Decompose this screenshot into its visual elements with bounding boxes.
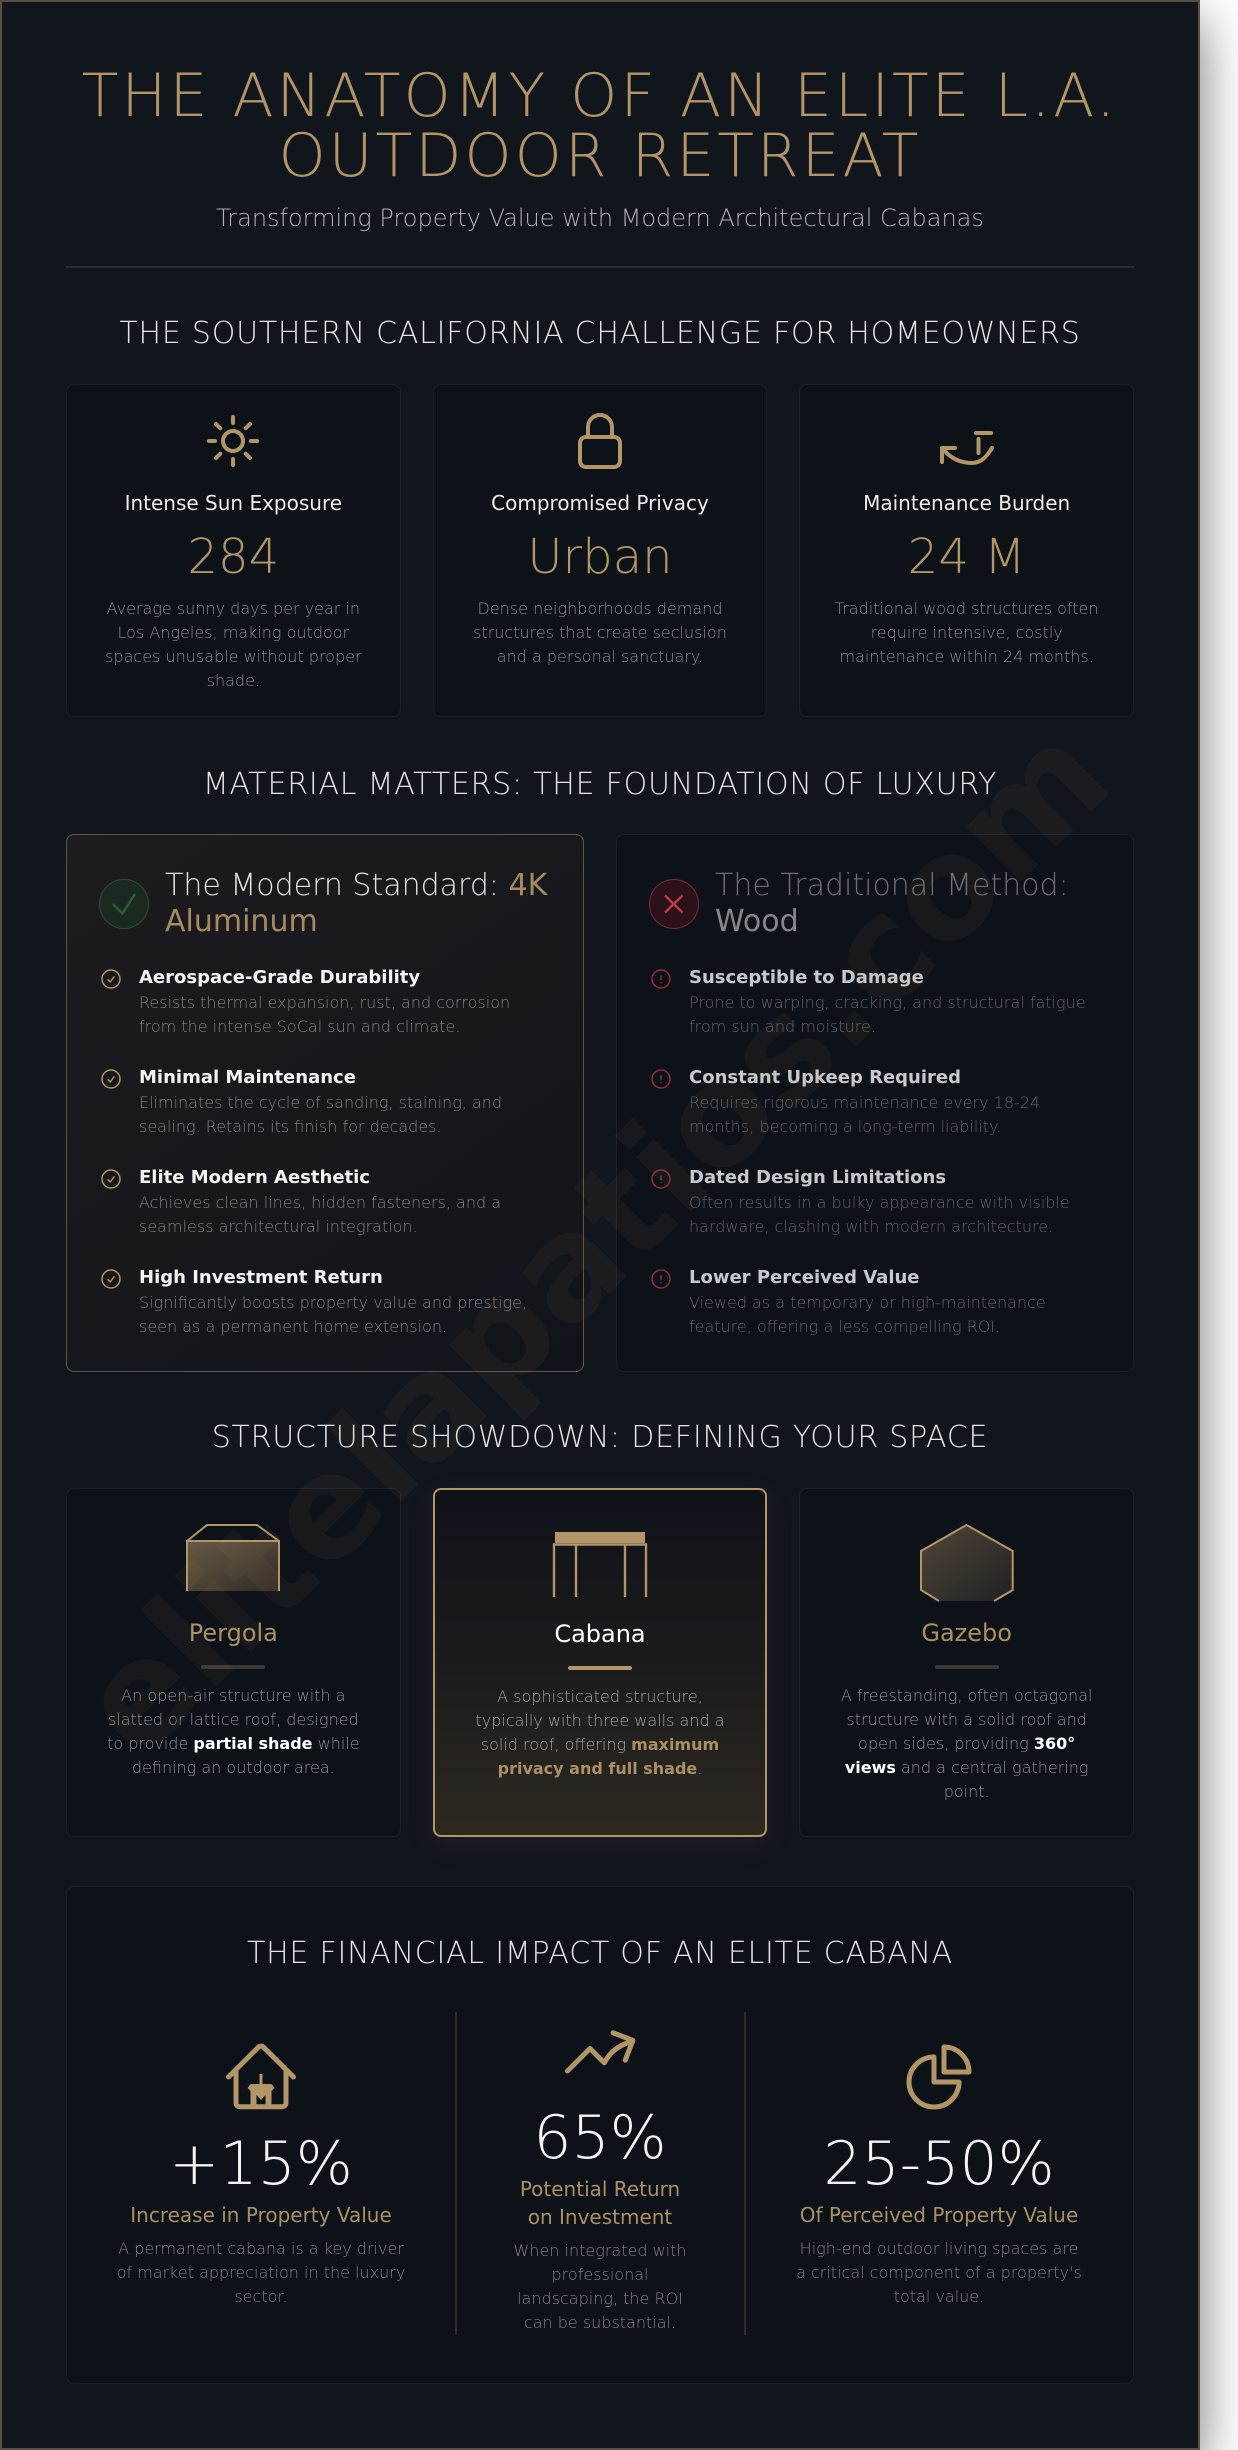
description: shade. [207, 671, 260, 690]
item text [689, 1193, 1070, 1236]
structure name: Cabana [554, 1620, 646, 1648]
stat text [450, 2239, 750, 2335]
stat: 24 M [908, 529, 1026, 585]
item text [689, 1293, 1046, 1336]
item title: Dated Design Limitations [689, 1167, 946, 1188]
stat value: +15% [169, 2129, 353, 2199]
description [475, 1687, 724, 1778]
icon: maintenance tool [940, 431, 994, 465]
panel: maintenance burden [799, 384, 1134, 717]
description: privacy and full shade. [498, 1759, 702, 1778]
panel: 4K aluminum [66, 834, 584, 1372]
item text: Requires rigorous maintenance every 18-24 [689, 1093, 1040, 1112]
item text [689, 993, 1086, 1036]
icon: red x badge [649, 879, 699, 929]
description: require intensive, costly [871, 623, 1063, 642]
item title: Susceptible to Damage [689, 967, 924, 988]
heading: materials section: MATERIAL MATTERS: THE FOUNDATION OF LUXURY [203, 767, 997, 802]
description [800, 1684, 1133, 1804]
panel heading [715, 868, 1069, 939]
stat label: Increase in Property Value [130, 2203, 392, 2227]
icon: lock [578, 413, 622, 469]
description: defining an outdoor area. [132, 1758, 335, 1777]
icon: check circle [101, 969, 121, 989]
item title: Minimal Maintenance [139, 1067, 356, 1088]
description: maintenance within 24 months. [839, 647, 1094, 666]
stat text: a critical component of a property's [796, 2263, 1082, 2282]
item text: Eliminates the cycle of sanding, staining, and [139, 1093, 502, 1112]
panel heading: Wood [715, 904, 799, 939]
description: open sides, providing 360° [858, 1734, 1075, 1753]
stat text: can be substantial. [524, 2313, 676, 2332]
description: typically with three walls and a [475, 1711, 724, 1730]
title: OUTDOOR RETREAT [278, 121, 922, 191]
item text [689, 1093, 1040, 1136]
icon: green check badge [99, 879, 149, 929]
icon: check circle [101, 1169, 121, 1189]
list item: design [651, 1167, 1070, 1236]
stat text [789, 2237, 1089, 2309]
item text: Prone to warping, cracking, and structural fatigue [689, 993, 1086, 1012]
stat value: 25-50% [823, 2129, 1055, 2199]
list item: aesthetic [101, 1167, 501, 1236]
stat text: total value. [894, 2287, 984, 2306]
description: structure with a solid roof and [846, 1710, 1087, 1729]
stat value: 65% [533, 2103, 667, 2173]
item text: Viewed as a temporary or high-maintenance [689, 1293, 1046, 1312]
panel heading [165, 868, 548, 939]
stat text: landscaping, the ROI [517, 2289, 683, 2308]
stat label [450, 2175, 750, 2231]
item text [139, 993, 510, 1036]
structure name: Pergola [189, 1619, 278, 1647]
description: solid roof, offering maximum [481, 1735, 719, 1754]
description: to provide partial shade while [107, 1734, 360, 1753]
icon: check circle [101, 1269, 121, 1289]
stat column: perceived value [789, 1987, 1089, 2327]
item title: Elite Modern Aesthetic [139, 1167, 370, 1188]
list item: durability [101, 967, 510, 1036]
title [82, 61, 1118, 191]
description [105, 599, 362, 690]
description: structures that create seclusion [473, 623, 727, 642]
panel: pergola [66, 1488, 401, 1837]
icon: house [221, 2037, 301, 2117]
panel heading: Aluminum [165, 904, 318, 939]
description: Traditional wood structures often [835, 599, 1099, 618]
panel heading: The Modern Standard: 4K [165, 868, 547, 903]
card title: Compromised Privacy [491, 491, 709, 515]
card title: Maintenance Burden [863, 491, 1070, 515]
item text: hardware, clashing with modern architecture. [689, 1217, 1053, 1236]
subtitle: Transforming Property Value with Modern Architectural Cabanas [216, 204, 984, 232]
description: Average sunny days per year in [107, 599, 360, 618]
item text: Achieves clean lines, hidden fasteners, and a [139, 1193, 501, 1212]
item text [139, 1093, 502, 1136]
item text: from sun and moisture. [689, 1017, 876, 1036]
description: Los Angeles, making outdoor [118, 623, 349, 642]
card title: Intense Sun Exposure [125, 491, 342, 515]
stat text: A permanent cabana is a key driver [118, 2239, 404, 2258]
stat: 284 [188, 529, 279, 585]
description: and a personal sanctuary. [497, 647, 703, 666]
description: Dense neighborhoods demand [478, 599, 722, 618]
item text: seen as a permanent home extension. [139, 1317, 447, 1336]
heading: structures section: STRUCTURE SHOWDOWN: DEFINING YOUR SPACE [212, 1420, 988, 1455]
description: A freestanding, often octagonal [841, 1686, 1092, 1705]
item title: Aerospace-Grade Durability [139, 967, 420, 988]
heading: challenge section: THE SOUTHERN CALIFORNIA CHALLENGE FOR HOMEOWNERS [119, 316, 1081, 351]
item text: feature, offering a less compelling ROI. [689, 1317, 1000, 1336]
icon: pergola [186, 1524, 280, 1591]
panel: cabana (highlighted) [433, 1488, 767, 1837]
icon: trending arrow [560, 2011, 640, 2091]
icon: warning circle [651, 1069, 671, 1089]
panel: intense sun exposure [66, 384, 401, 717]
list item: investment [101, 1267, 527, 1336]
item text: Resists thermal expansion, rust, and corrosion [139, 993, 510, 1012]
item text: Significantly boosts property value and prestige, [139, 1293, 527, 1312]
list item: value [651, 1267, 1046, 1336]
description: views and a central gathering [845, 1758, 1088, 1777]
item text [139, 1193, 501, 1236]
description: point. [944, 1782, 990, 1801]
panel: financial impact [66, 1886, 1134, 2384]
item title: High Investment Return [139, 1267, 383, 1288]
description: A sophisticated structure, [497, 1687, 703, 1706]
stat text: professional [552, 2265, 648, 2284]
item text: months, becoming a long-term liability. [689, 1117, 1001, 1136]
stat column: return on investment [450, 1987, 750, 2327]
stat label: Of Perceived Property Value [800, 2203, 1078, 2227]
item title: Lower Perceived Value [689, 1267, 920, 1288]
item text: sealing. Retains its finish for decades. [139, 1117, 442, 1136]
icon: pie chart [899, 2037, 979, 2117]
item text: from the intense SoCal sun and climate. [139, 1017, 460, 1036]
list item: upkeep [651, 1067, 1040, 1136]
description [107, 1686, 360, 1777]
list item: maintenance [101, 1067, 502, 1136]
description: slatted or lattice roof, designed [108, 1710, 359, 1729]
item text [139, 1293, 527, 1336]
stat: Urban [527, 529, 673, 585]
item text: seamless architectural integration. [139, 1217, 418, 1236]
item title: Constant Upkeep Required [689, 1067, 961, 1088]
panel heading: The Traditional Method: [715, 868, 1069, 903]
icon: check circle [101, 1069, 121, 1089]
panel: wood [616, 834, 1134, 1372]
panel: compromised privacy [433, 384, 767, 717]
panel: gazebo [799, 1488, 1134, 1837]
stat text: High-end outdoor living spaces are [800, 2239, 1078, 2258]
icon: warning circle [651, 969, 671, 989]
heading: financial section: THE FINANCIAL IMPACT OF AN ELITE CABANA [247, 1936, 953, 1971]
description [835, 599, 1099, 666]
stat text: When integrated with [513, 2241, 687, 2260]
title: THE ANATOMY OF AN ELITE L.A. [82, 61, 1118, 131]
stat text [111, 2237, 411, 2309]
icon: sun [207, 415, 259, 467]
structure name: Gazebo [921, 1619, 1012, 1647]
stat column: property value [111, 1987, 411, 2327]
icon: warning circle [651, 1269, 671, 1289]
watermark: elitelapatios.com [47, 693, 1141, 1787]
description: spaces unusable without proper [105, 647, 362, 666]
stat text: sector. [234, 2287, 288, 2306]
icon: gazebo [920, 1524, 1014, 1602]
description [473, 599, 727, 666]
icon: warning circle [651, 1169, 671, 1189]
stat label: Potential Return [520, 2177, 680, 2201]
stat text: of market appreciation in the luxury [117, 2263, 405, 2282]
item text: Often results in a bulky appearance with visible [689, 1193, 1070, 1212]
stat label: on Investment [528, 2205, 672, 2229]
description: An open-air structure with a [121, 1686, 345, 1705]
icon: cabana [552, 1532, 648, 1597]
list item: damage [651, 967, 1086, 1036]
